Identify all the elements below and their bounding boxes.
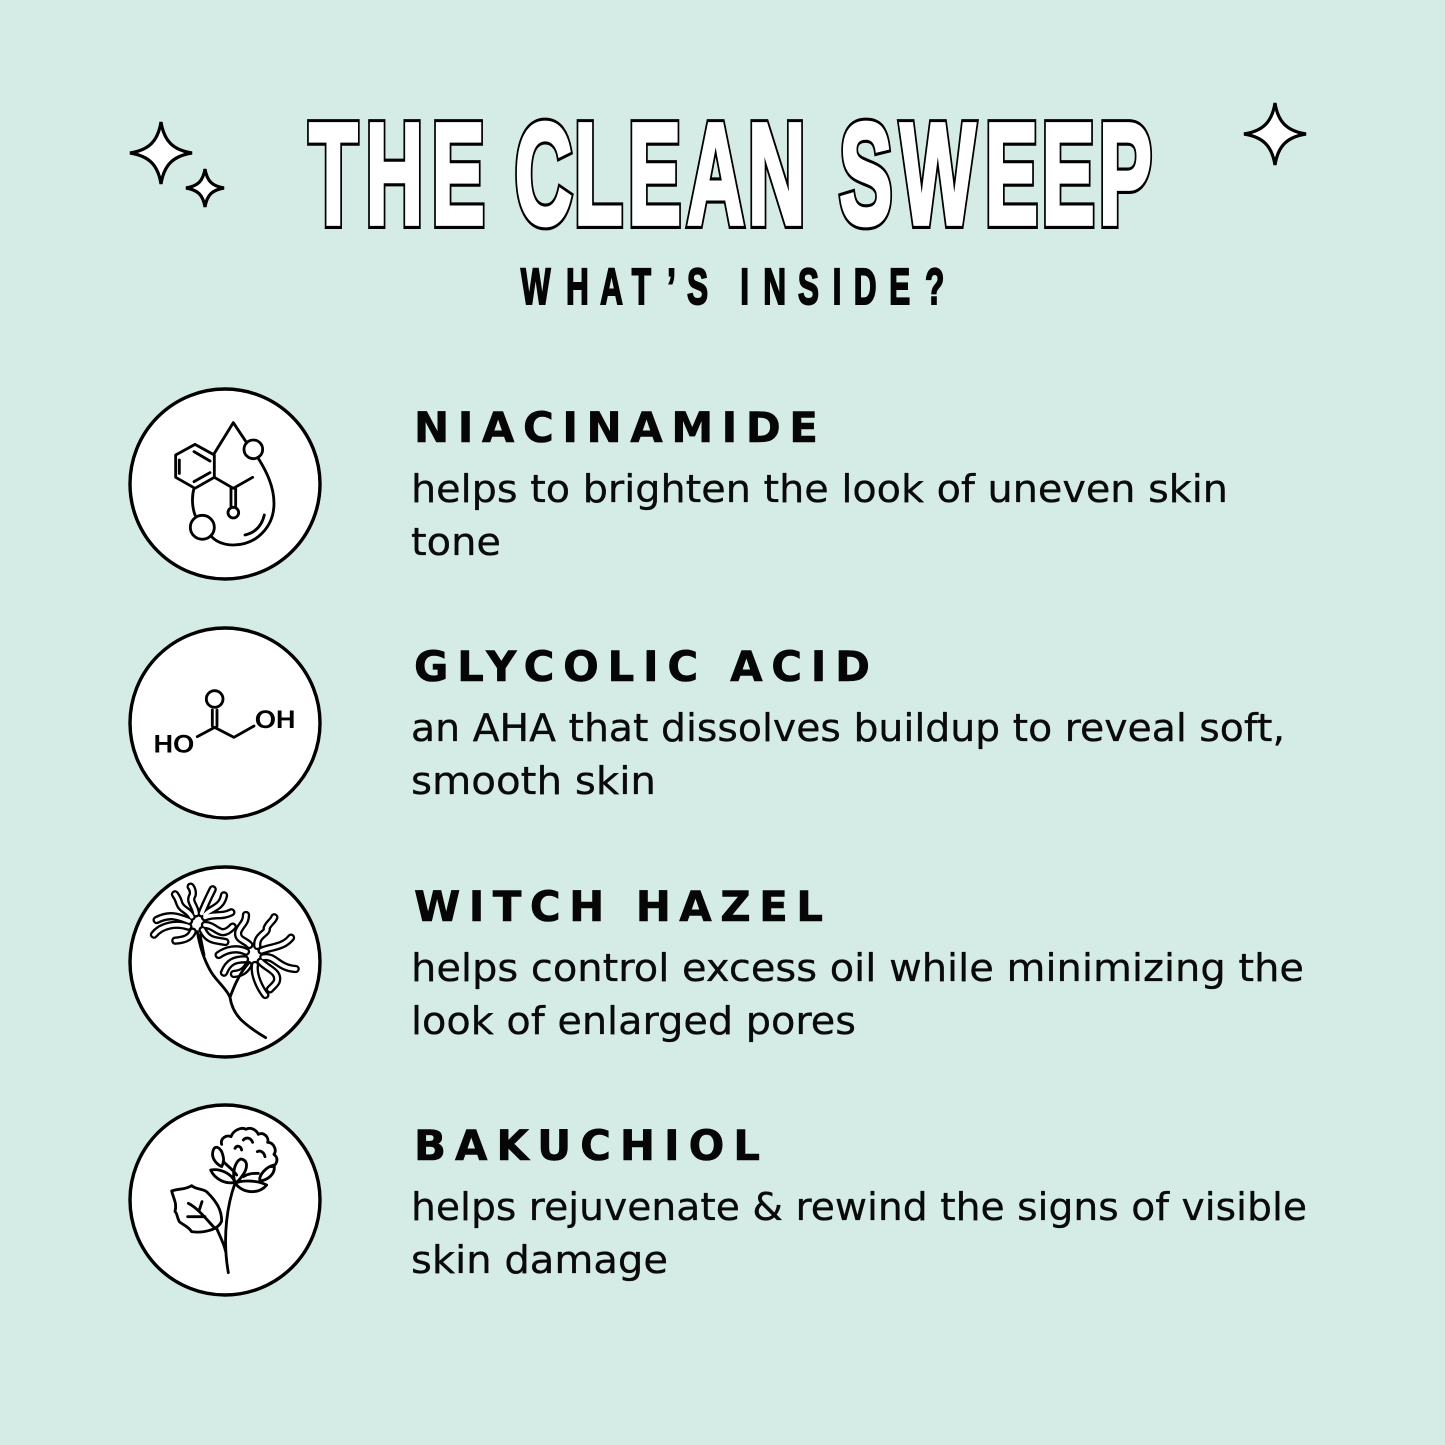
text: glycolic acid description: smooth skin — [411, 759, 656, 803]
icon: witch hazel flower — [130, 867, 320, 1057]
text: bakuchiol description: skin damage — [411, 1238, 668, 1282]
subtitle: WHAT’S INSIDE? — [521, 258, 944, 315]
panel: witch hazel — [130, 867, 1304, 1057]
text: bakuchiol description — [411, 1185, 1307, 1282]
heading: glycolic acid: GLYCOLIC ACID — [414, 642, 870, 691]
title: THE CLEAN SWEEP — [309, 92, 1152, 255]
text: niacinamide description: helps to brighten the look of uneven skin — [411, 467, 1228, 511]
icon: small sparkle left — [186, 169, 224, 207]
icon: large sparkle left — [130, 122, 192, 184]
icon: bakuchiol plant — [130, 1105, 320, 1295]
icon: glycolic acid formula: HO — [153, 733, 194, 758]
text: niacinamide description — [411, 467, 1228, 564]
text: bakuchiol description: helps rejuvenate & rewind the signs of visible — [411, 1185, 1307, 1229]
text: witch hazel description: look of enlarged pores — [411, 999, 856, 1043]
text: glycolic acid description — [411, 706, 1285, 803]
icon: glycolic acid formula: OH — [255, 708, 296, 733]
heading: niacinamide: NIACINAMIDE — [414, 403, 818, 452]
text: glycolic acid description: an AHA that dissolves buildup to reveal soft, — [411, 706, 1285, 750]
text: witch hazel description: helps control excess oil while minimizing the — [411, 946, 1304, 990]
title: THE CLEAN SWEEP — [309, 92, 1152, 255]
heading: bakuchiol: BAKUCHIOL — [414, 1121, 760, 1170]
panel: bakuchiol — [130, 1105, 1307, 1295]
heading: witch hazel: WITCH HAZEL — [414, 882, 823, 931]
icon: glycolic acid formula — [130, 628, 320, 818]
icon: sparkle right — [1244, 103, 1306, 165]
panel: glycolic acid — [130, 628, 1285, 818]
icon: niacinamide molecule drop — [130, 389, 320, 579]
text: niacinamide description: tone — [411, 520, 501, 564]
text: witch hazel description — [411, 946, 1304, 1043]
panel: niacinamide — [130, 389, 1228, 579]
